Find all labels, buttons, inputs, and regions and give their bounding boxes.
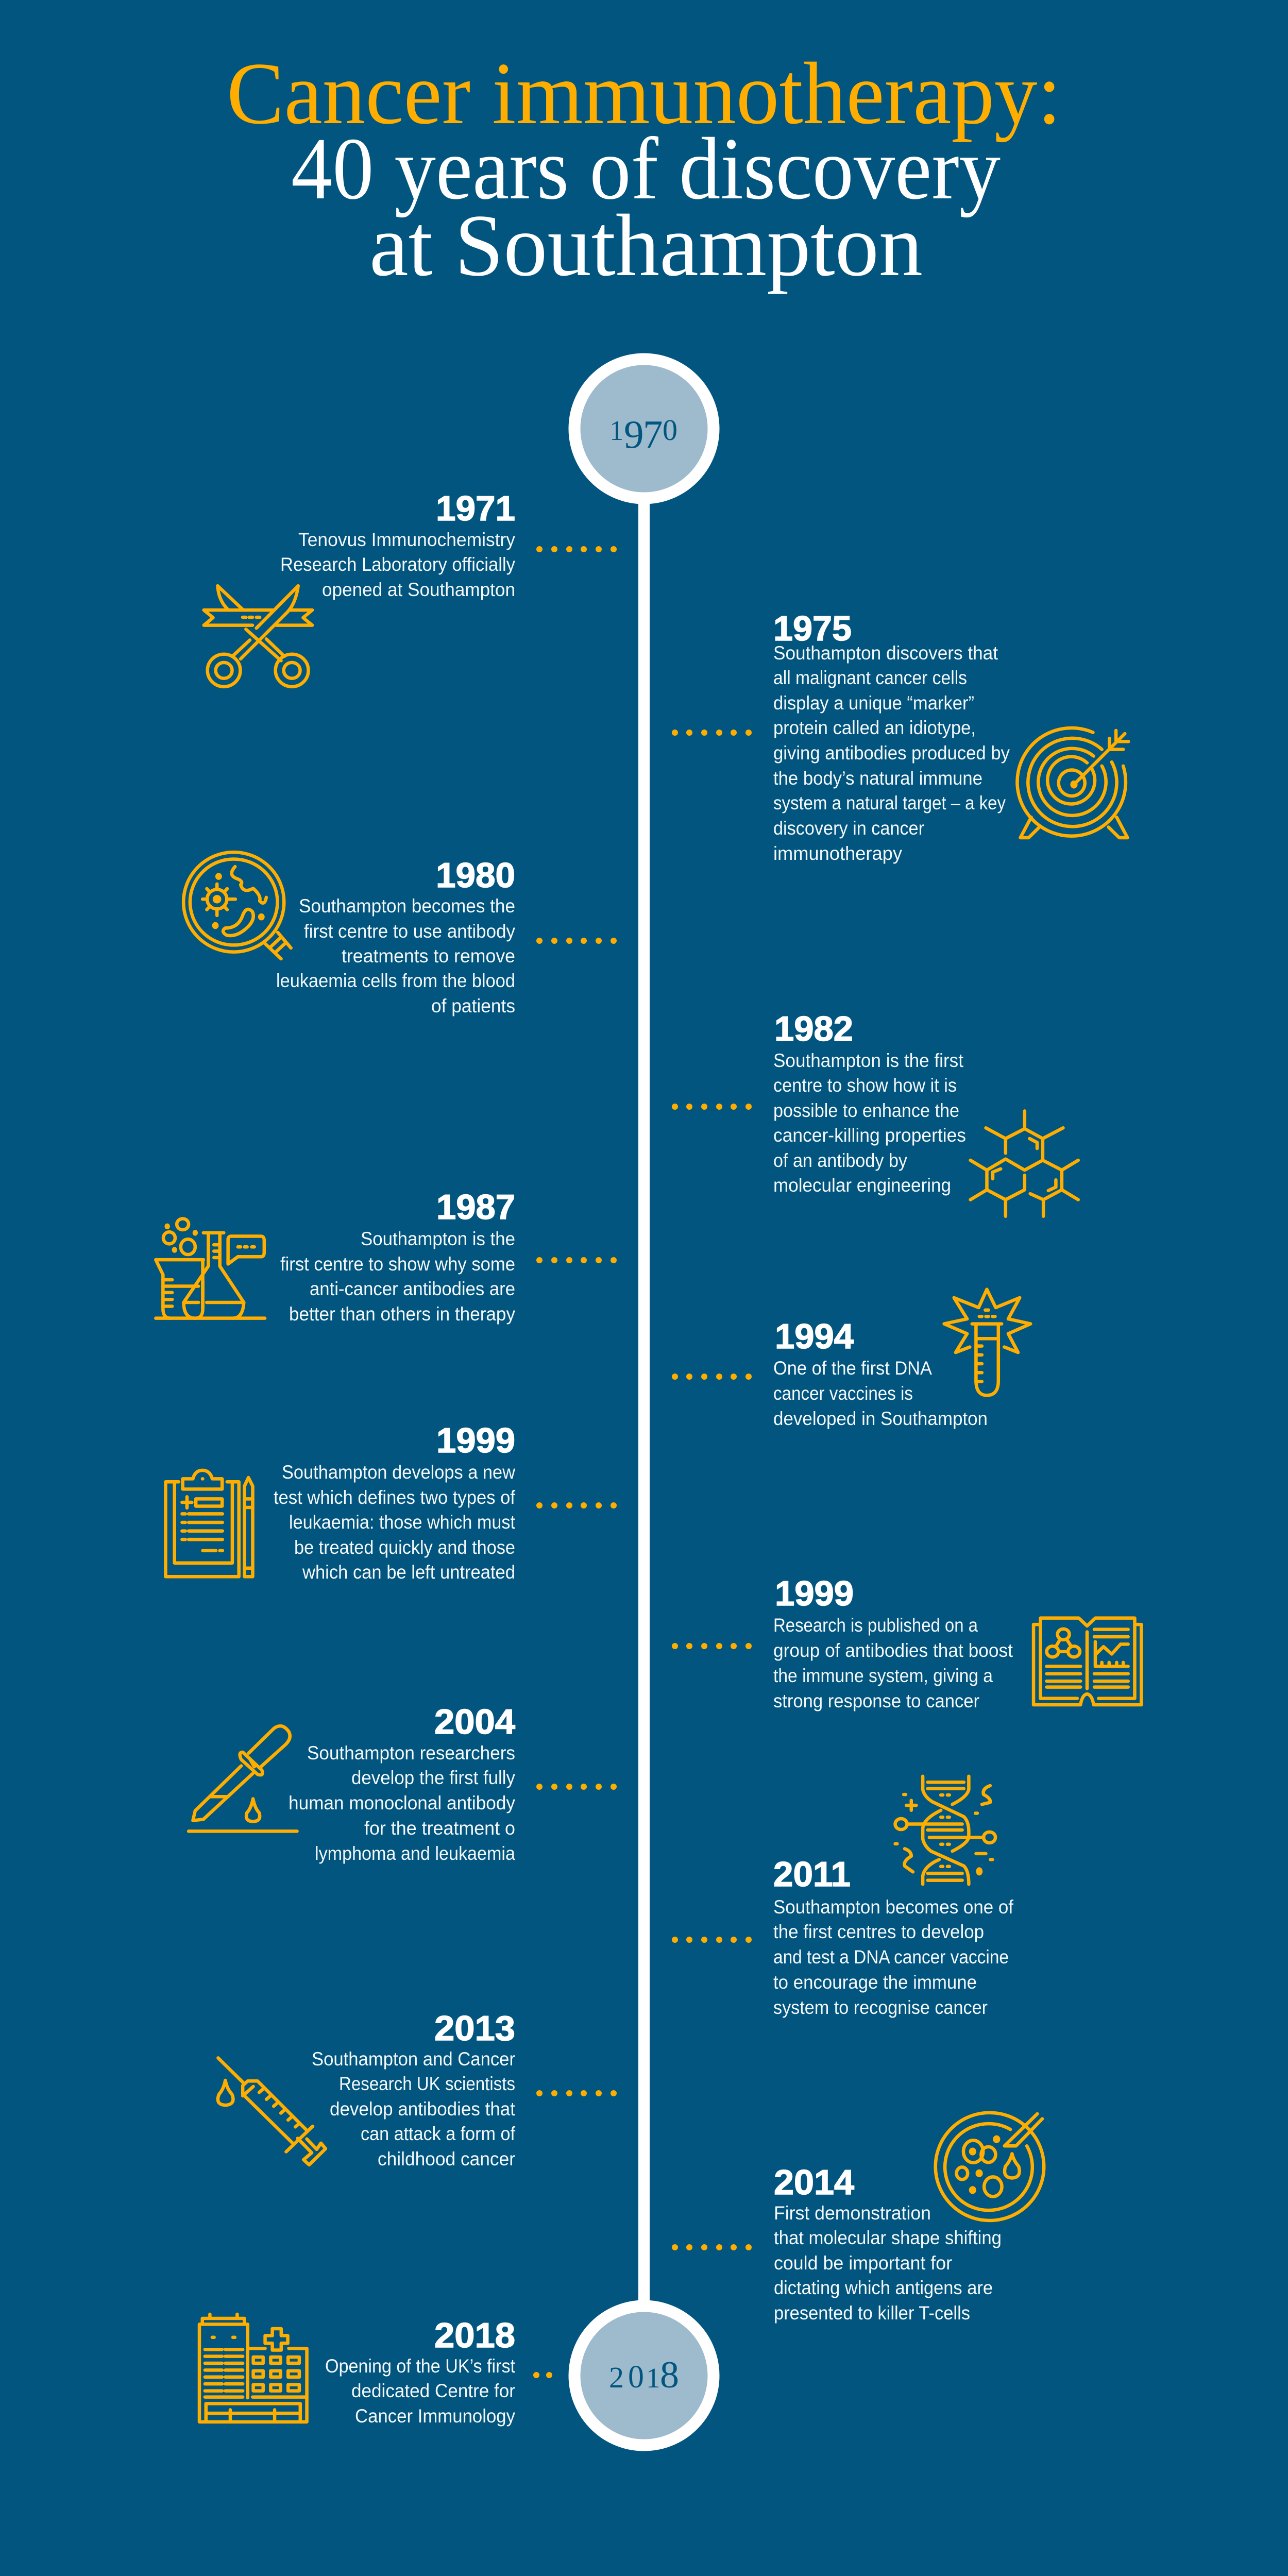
entry: 1971: Research Laboratory officially (280, 554, 515, 575)
entry: 1982: molecular engineering (773, 1175, 951, 1196)
entry: 1975: all malignant cancer cells (773, 667, 967, 688)
entry: 2004: human monoclonal antibody (289, 1792, 515, 1814)
start node 1970: 1 (609, 415, 623, 446)
dots: 2011 (672, 1937, 752, 1943)
entry: 2013 (312, 2009, 516, 2170)
entry: 2014: 2014 (774, 2163, 854, 2202)
entry: 2014: presented to killer T-cells (774, 2302, 970, 2324)
entry: 1975: discovery in cancer (773, 818, 924, 839)
entry: 1999 left: which can be left untreated (302, 1562, 515, 1583)
entry: 2018: Cancer Immunology (355, 2405, 515, 2427)
dots: 2014 (672, 2244, 752, 2250)
entry: 2004: Southampton researchers (307, 1742, 515, 1764)
icon: magnifier with cells (183, 852, 291, 959)
entry: 2018: dedicated Centre for (351, 2380, 515, 2401)
dots: 1994 (672, 1374, 752, 1380)
entry: 1980: 1980 (436, 856, 515, 895)
entry: 2011: 2011 (773, 1855, 851, 1894)
title: Cancer immunotherapy: (227, 45, 1061, 143)
entry: 2004: develop the first fully (351, 1767, 515, 1788)
entry: 2004: 2004 (434, 1702, 515, 1741)
entry: 1980: Southampton becomes the (299, 895, 515, 917)
entry: 1982: centre to show how it is (773, 1075, 957, 1096)
icon: hospital building (199, 2314, 307, 2422)
dots: 1975 (672, 730, 752, 736)
entry: 1980: first centre to use antibody (304, 921, 515, 942)
entry: 1987: better than others in therapy (289, 1303, 515, 1325)
end node 2018: 0 (628, 2360, 644, 2395)
entry: 2014: that molecular shape shifting (774, 2227, 1002, 2248)
icon: clipboard and pencil (165, 1470, 252, 1577)
end node 2018: 8 (660, 2354, 679, 2396)
end node 2018 (574, 2306, 714, 2445)
entry: 2014: First demonstration (774, 2202, 931, 2224)
entry: 1999 left: Southampton develops a new (282, 1462, 515, 1483)
entry: 1999 left: leukaemia: those which must (289, 1512, 516, 1533)
entry: 1971: Tenovus Immunochemistry (298, 529, 515, 550)
entry: 1975: display a unique “marker” (773, 692, 974, 714)
entry: 1987: Southampton is the (361, 1228, 515, 1249)
entry: 1999 left: be treated quickly and those (294, 1537, 515, 1558)
dots: 1999 left (536, 1502, 617, 1509)
start node 1970 (574, 359, 714, 498)
icon: syringe with drop (218, 2058, 326, 2165)
entry: 2011: the first centres to develop (773, 1921, 984, 1942)
entry: 2013: Southampton and Cancer (312, 2048, 515, 2070)
entry: 1994: One of the first DNA (773, 1358, 932, 1379)
entry: 1999 left (274, 1421, 516, 1583)
title: at Southampton (369, 197, 923, 295)
icon: DNA helix (895, 1776, 995, 1884)
end node 2018: 2 (609, 2361, 624, 2394)
start node 1970: 7 (643, 412, 663, 456)
icon: target with arrow (1017, 728, 1128, 838)
entry: 1971: opened at Southampton (322, 579, 515, 600)
entry: 2011: system to recognise cancer (773, 1997, 988, 2018)
entry: 1971 (280, 489, 515, 600)
entry: 1987: anti-cancer antibodies are (310, 1278, 515, 1299)
entry: 1982: Southampton is the first (773, 1050, 964, 1071)
icon: petri dish with cells (936, 2113, 1044, 2221)
entry: 1982: cancer-killing properties (773, 1125, 966, 1146)
icon: open book with charts (1033, 1618, 1141, 1705)
entry: 1987: 1987 (436, 1188, 515, 1227)
entry: 1975: immunotherapy (773, 843, 902, 864)
icon: test tube with burst (944, 1290, 1030, 1395)
entry: 1982: 1982 (774, 1009, 853, 1048)
entry: 1982 (773, 1009, 966, 1196)
dots: 2018 (533, 2372, 552, 2378)
entry: 1999 left: test which defines two types of (274, 1487, 516, 1508)
entry: 2018: Opening of the UK’s first (325, 2355, 516, 2377)
dots: 1971 (536, 546, 617, 552)
entry: 1975 (773, 609, 1010, 864)
entry: 1999 right: group of antibodies that boost (773, 1640, 1013, 1661)
entry: 2014 (774, 2163, 1002, 2324)
start node 1970: 9 (624, 412, 644, 456)
entry: 1982: possible to enhance the (773, 1100, 959, 1121)
entry: 1994: 1994 (775, 1317, 854, 1356)
entry: 1980: treatments to remove (342, 945, 515, 967)
entry: 2011: and test a DNA cancer vaccine (773, 1946, 1009, 1968)
title (227, 45, 1061, 295)
entry: 1999 right (773, 1574, 1013, 1711)
icon: molecule hexagons (971, 1111, 1078, 1216)
timeline vertical line (638, 495, 650, 2308)
entry: 2004: lymphoma and leukaemia (315, 1843, 515, 1864)
entry: 1987 (280, 1188, 515, 1325)
entry: 1999 right: 1999 (775, 1574, 854, 1613)
entry: 2011 (773, 1855, 1014, 2018)
entry: 1975: 1975 (773, 609, 852, 648)
entry: 2011: Southampton becomes one of (773, 1896, 1014, 1918)
entry: 1975: protein called an idiotype, (773, 717, 976, 738)
icon: pipette dropper (189, 1726, 297, 1831)
entry: 1999 left: 1999 (436, 1421, 515, 1460)
entry: 2013: 2013 (434, 2009, 515, 2048)
entry: 1971: 1971 (436, 489, 515, 528)
start node 1970: 0 (663, 413, 677, 447)
entry: 2004: for the treatment o (364, 1818, 515, 1839)
entry: 1994: cancer vaccines is (773, 1383, 913, 1404)
entry: 1987: first centre to show why some (280, 1253, 515, 1275)
entry: 1999 right: Research is published on a (773, 1615, 978, 1636)
entry: 2018 (325, 2316, 516, 2427)
entry: 2013: Research UK scientists (339, 2073, 515, 2094)
icon: scissors cutting ribbon (204, 586, 312, 687)
entry: 1975: the body’s natural immune (773, 768, 982, 789)
entry: 1975: system a natural target – a key (773, 792, 1006, 814)
entry: 2013: childhood cancer (378, 2148, 515, 2170)
icon: lab flasks (156, 1218, 265, 1318)
dots: 1987 (536, 1257, 617, 1263)
entry: 1982: of an antibody by (773, 1150, 907, 1171)
entry: 2014: could be important for (774, 2252, 952, 2274)
entry: 2013: can attack a form of (361, 2123, 516, 2144)
entry: 2018: 2018 (434, 2316, 515, 2355)
dots: 1982 (672, 1104, 752, 1110)
dots: 1980 (536, 938, 617, 944)
entry: 2011: to encourage the immune (773, 1972, 977, 1993)
entry: 1980: leukaemia cells from the blood (276, 970, 515, 991)
entry: 1980: of patients (431, 995, 515, 1016)
entry: 2013: develop antibodies that (330, 2098, 516, 2120)
dots: 2013 (536, 2090, 617, 2096)
entry: 1994: developed in Southampton (773, 1408, 988, 1429)
entry: 1975: giving antibodies produced by (773, 742, 1010, 764)
entry: 2004 (289, 1702, 515, 1864)
entry: 1975: Southampton discovers that (773, 642, 998, 664)
dots: 2004 (536, 1784, 617, 1790)
entry: 1999 right: strong response to cancer (773, 1690, 979, 1711)
title: 40 years of discovery (291, 120, 1001, 218)
entry: 1980 (276, 856, 515, 1016)
dots: 1999 right (672, 1643, 752, 1649)
entry: 2014: dictating which antigens are (774, 2277, 993, 2298)
entry: 1994 (773, 1317, 988, 1429)
entry: 1999 right: the immune system, giving a (773, 1665, 993, 1686)
end node 2018: 1 (646, 2362, 660, 2394)
